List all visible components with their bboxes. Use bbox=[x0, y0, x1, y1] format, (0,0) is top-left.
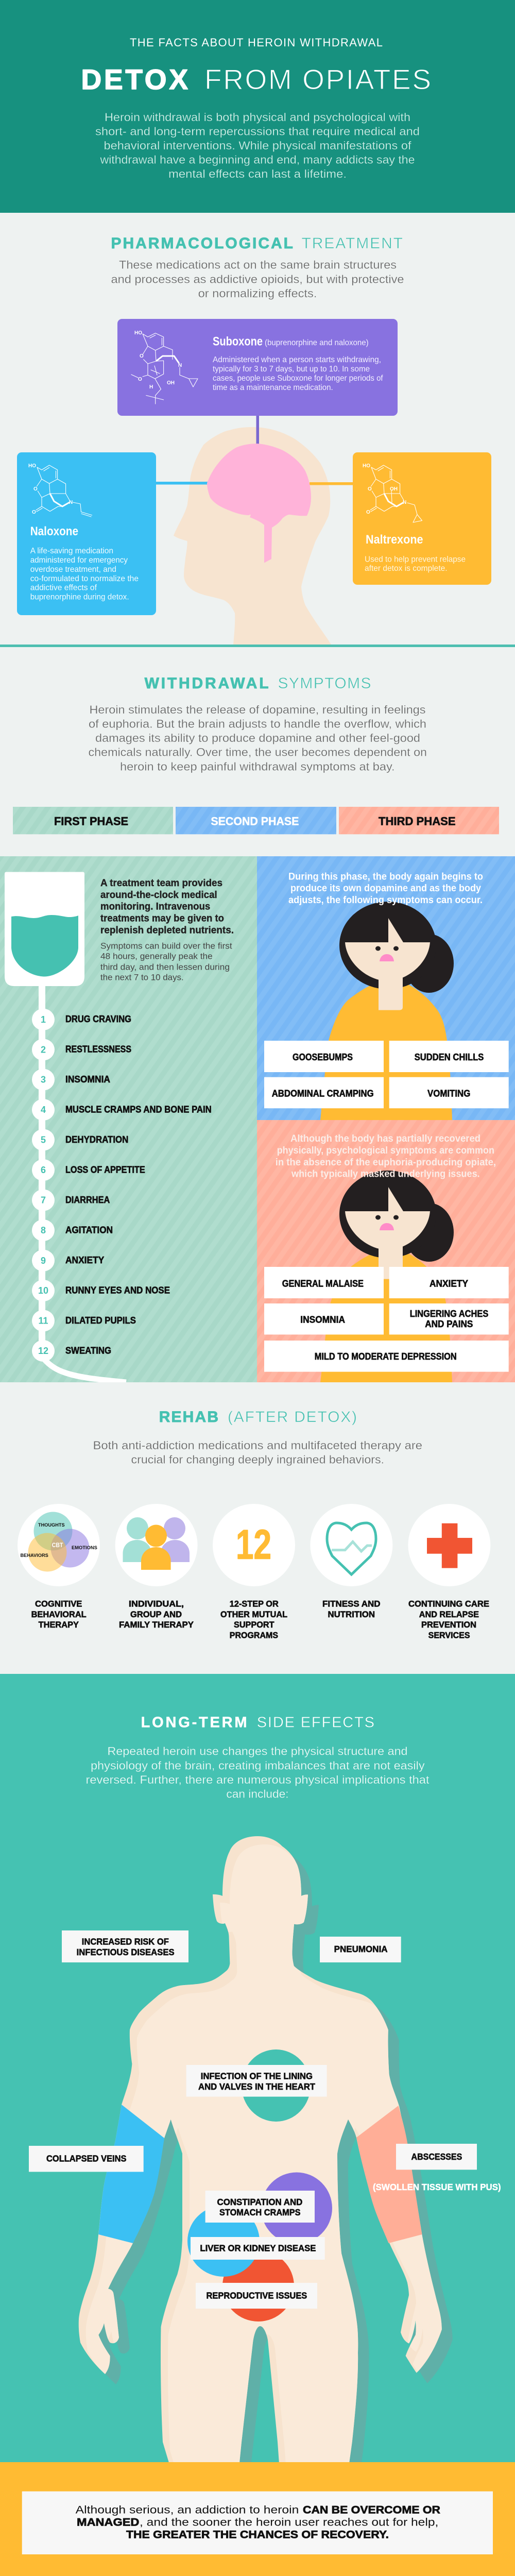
icon: cbt venn diagram: EMOTIONS bbox=[72, 1545, 97, 1551]
icon: iv tube bbox=[39, 984, 126, 1382]
symptom: lingering aches and pains: AND PAINS bbox=[425, 1319, 473, 1329]
second phase text: During this phase, the body again begins to bbox=[288, 872, 483, 882]
card: naloxone bbox=[17, 452, 156, 615]
molecule: naloxone: HO bbox=[28, 463, 36, 469]
molecule: suboxone: N bbox=[178, 363, 182, 368]
illustration: human body bbox=[79, 1836, 453, 2488]
heading: pharmacological treatment: PHARMACOLOGICAL bbox=[111, 235, 293, 252]
icon: cbt venn diagram: CBT bbox=[52, 1541, 63, 1549]
icon: cbt venn diagram: BEHAVIORS bbox=[21, 1553, 48, 1558]
panel: rehab bbox=[0, 1382, 515, 1674]
label: cognitive behavioral therapy bbox=[31, 1600, 87, 1630]
first phase lead text: monitoring. Intravenous bbox=[100, 902, 210, 912]
symptom: mild to moderate depression bbox=[264, 1341, 509, 1372]
long-term intro text: Repeated heroin use changes the physical structure and bbox=[107, 1744, 408, 1758]
suboxone description: time as a maintenance medication. bbox=[213, 383, 333, 392]
abscesses note: (SWOLLEN TISSUE WITH PUS) bbox=[373, 2182, 501, 2192]
header intro text: behavioral interventions. While physical manifestations of bbox=[104, 139, 411, 152]
callout: heart infection: AND VALVES IN THE HEART bbox=[198, 2081, 315, 2092]
symptom list: 2 bbox=[41, 1045, 46, 1055]
heading: withdrawal symptoms: SYMPTOMS bbox=[278, 675, 371, 692]
long-term intro text bbox=[85, 1744, 430, 1801]
closing text: MANAGED bbox=[77, 2517, 139, 2529]
symptom list: DRUG CRAVING bbox=[65, 1014, 131, 1024]
label: continuing care: PREVENTION bbox=[421, 1620, 476, 1630]
third phase text: in the absence of the euphoria-producing opiate, bbox=[276, 1157, 496, 1168]
heading: rehab: REHAB bbox=[159, 1409, 218, 1426]
symptom: insomnia: INSOMNIA bbox=[300, 1315, 345, 1325]
withdrawal intro text: of euphoria. But the brain adjusts to handle the overflow, which bbox=[89, 718, 426, 731]
heading: rehab bbox=[159, 1409, 357, 1426]
withdrawal intro text: chemicals naturally. Over time, the user becomes dependent on bbox=[89, 746, 427, 759]
naltrexone description: Used to help prevent relapse bbox=[365, 555, 466, 564]
molecule: naltrexone: OH bbox=[390, 486, 398, 492]
label: individual, group and family therapy: FAMILY THERAPY bbox=[119, 1620, 194, 1630]
label: continuing care: CONTINUING CARE bbox=[408, 1600, 489, 1609]
heading: pharmacological treatment: TREATMENT bbox=[302, 235, 403, 252]
molecule: naltrexone: HO bbox=[363, 463, 370, 469]
callout: collapsed veins bbox=[29, 2146, 144, 2172]
symptom list: 10 bbox=[38, 1285, 48, 1296]
symptom list: DIARRHEA bbox=[65, 1195, 110, 1205]
callout: infectious diseases: INFECTIOUS DISEASES bbox=[77, 1947, 175, 1957]
illustration: brain bbox=[207, 444, 311, 563]
callout: infectious diseases: INCREASED RISK OF bbox=[82, 1936, 169, 1946]
symptom: goosebumps bbox=[264, 1041, 384, 1072]
molecule: naltrexone: O bbox=[368, 486, 372, 492]
first phase detail text: 48 hours, generally peak the bbox=[100, 952, 213, 961]
callout: infectious diseases bbox=[62, 1930, 188, 1962]
molecule: naloxone: O bbox=[32, 510, 36, 515]
symptom list: RESTLESSNESS bbox=[65, 1044, 131, 1054]
third phase text: which typically masked underlying issues. bbox=[291, 1169, 480, 1180]
pharmacological intro text bbox=[111, 259, 404, 300]
icon: heart with pulse bbox=[310, 1504, 392, 1586]
withdrawal intro text: heroin to keep painful withdrawal symptoms at bay. bbox=[120, 760, 395, 773]
label: 12-step programs: SUPPORT bbox=[234, 1620, 274, 1630]
heading: long-term side effects: LONG-TERM bbox=[141, 1715, 247, 1731]
panel: first phase bbox=[0, 856, 257, 1382]
symptom: general malaise: GENERAL MALAISE bbox=[282, 1278, 364, 1289]
symptom list: ANXIETY bbox=[65, 1255, 104, 1265]
molecule: naloxone: N bbox=[69, 500, 73, 505]
molecule: suboxone: H bbox=[149, 384, 153, 390]
molecule: suboxone: O bbox=[140, 353, 144, 359]
card: naltrexone bbox=[353, 452, 491, 585]
callout: pneumonia bbox=[320, 1937, 401, 1962]
title: FROM OPIATES bbox=[204, 63, 431, 95]
symptom: sudden chills: SUDDEN CHILLS bbox=[415, 1052, 484, 1062]
icon: number 12: 12 bbox=[236, 1522, 271, 1568]
header kicker: THE FACTS ABOUT HEROIN WITHDRAWAL bbox=[130, 36, 383, 49]
callout: pneumonia: PNEUMONIA bbox=[334, 1944, 388, 1954]
naloxone description: addictive effects of bbox=[30, 584, 97, 592]
closing text bbox=[76, 2504, 440, 2541]
molecule: suboxone bbox=[131, 330, 198, 404]
title: DETOX bbox=[81, 63, 188, 95]
icon: cbt venn diagram: THOUGHTS bbox=[38, 1522, 65, 1528]
arm highlight: collapsed veins bbox=[98, 2105, 164, 2243]
illustration: woman bbox=[320, 902, 454, 1120]
symptom: mild to moderate depression: MILD TO MODERATE DEPRESSION bbox=[315, 1351, 457, 1362]
panel: pharmacological treatment bbox=[17, 235, 491, 645]
rehab intro text bbox=[93, 1439, 422, 1466]
panel: withdrawal symptoms intro bbox=[13, 675, 499, 834]
molecule: naloxone: O bbox=[33, 486, 38, 492]
title bbox=[81, 63, 431, 95]
callout: liver or kidney disease: LIVER OR KIDNEY DISEASE bbox=[200, 2243, 316, 2253]
label: individual, group and family therapy: GROUP AND bbox=[130, 1610, 182, 1619]
suboxone description: Administered when a person starts withdrawing, bbox=[213, 355, 381, 364]
label: continuing care: AND RELAPSE bbox=[419, 1610, 479, 1619]
tab: third phase: THIRD PHASE bbox=[379, 815, 456, 828]
first phase detail text bbox=[100, 941, 232, 982]
closing text: Although serious, an addiction to heroin bbox=[76, 2504, 299, 2516]
icon: group of people bbox=[115, 1504, 198, 1586]
first phase lead text: A treatment team provides bbox=[100, 878, 222, 889]
illustration: head profile bbox=[174, 427, 331, 645]
connector: suboxone bbox=[256, 416, 259, 445]
first phase lead text: treatments may be given to bbox=[100, 913, 224, 924]
heading: pharmacological treatment bbox=[111, 235, 403, 252]
long-term intro text: can include: bbox=[226, 1788, 289, 1801]
symptom list: 11 bbox=[38, 1316, 48, 1326]
suboxone description: typically for 3 to 7 days, but up to 10. In some bbox=[213, 365, 370, 374]
panel: closing message bbox=[0, 2462, 515, 2576]
second phase text bbox=[288, 872, 483, 906]
symptom list: MUSCLE CRAMPS AND BONE PAIN bbox=[65, 1105, 212, 1115]
first phase lead text bbox=[100, 878, 234, 936]
tab: first phase: FIRST PHASE bbox=[54, 815, 128, 828]
molecule: naltrexone bbox=[363, 463, 422, 522]
callout: abscesses bbox=[396, 2144, 477, 2170]
closing text: THE GREATER THE CHANCES OF RECOVERY. bbox=[126, 2529, 389, 2541]
symptom list: 5 bbox=[41, 1135, 46, 1145]
arm highlight: abscesses bbox=[356, 2106, 422, 2243]
molecule: naltrexone: O bbox=[366, 510, 370, 515]
symptom list: INSOMNIA bbox=[65, 1074, 110, 1084]
naloxone description: buprenorphine during detox. bbox=[30, 592, 129, 602]
label: cognitive behavioral therapy: THERAPY bbox=[39, 1620, 79, 1630]
symptom: vomiting bbox=[389, 1077, 509, 1108]
label: 12-step programs bbox=[220, 1600, 287, 1640]
callout: constipation: STOMACH CRAMPS bbox=[219, 2207, 301, 2217]
callout: reproductive issues bbox=[196, 2283, 317, 2309]
callout: constipation: CONSTIPATION AND bbox=[217, 2197, 302, 2207]
panel: third phase bbox=[257, 1120, 515, 1382]
callout: constipation bbox=[205, 2191, 315, 2223]
heading: withdrawal symptoms bbox=[145, 675, 371, 692]
naltrexone name: Naltrexone bbox=[366, 533, 423, 547]
header intro text: withdrawal have a beginning and end, many addicts say the bbox=[99, 154, 415, 166]
callout: heart infection bbox=[186, 2065, 327, 2097]
symptom: anxiety: ANXIETY bbox=[430, 1278, 468, 1289]
withdrawal intro text: damages its ability to produce dopamine and other feel-good bbox=[95, 732, 420, 744]
panel: header bbox=[0, 0, 515, 213]
pharmacological intro text: These medications act on the same brain structures bbox=[119, 259, 397, 272]
symptom list: RUNNY EYES AND NOSE bbox=[65, 1285, 170, 1295]
heading: long-term side effects: SIDE EFFECTS bbox=[257, 1715, 374, 1731]
tab: second phase: SECOND PHASE bbox=[211, 815, 299, 828]
tab: third phase bbox=[339, 807, 499, 834]
symptom list: 12 bbox=[38, 1346, 48, 1356]
suboxone name: Suboxone bbox=[213, 335, 263, 349]
naloxone description: administered for emergency bbox=[30, 556, 128, 565]
third phase text: Although the body has partially recovered bbox=[290, 1133, 480, 1144]
label: individual, group and family therapy: INDIVIDUAL, bbox=[129, 1600, 184, 1609]
header intro text bbox=[95, 111, 420, 180]
symptom list: SWEATING bbox=[65, 1346, 111, 1356]
label: 12-step programs: 12-STEP OR bbox=[230, 1600, 279, 1609]
symptom: sudden chills bbox=[389, 1041, 509, 1072]
symptom list: 6 bbox=[41, 1165, 46, 1175]
organ: reproductive bbox=[222, 2250, 294, 2321]
symptom list bbox=[32, 1009, 212, 1362]
molecule: naltrexone: N bbox=[403, 500, 406, 505]
label: 12-step programs: PROGRAMS bbox=[230, 1631, 278, 1640]
suboxone description: cases, people use Suboxone for longer periods of bbox=[213, 374, 383, 383]
label: continuing care bbox=[408, 1600, 489, 1640]
header intro text: short- and long-term repercussions that require medical and bbox=[95, 125, 420, 138]
first phase detail text: the next 7 to 10 days. bbox=[100, 973, 184, 982]
naltrexone description bbox=[365, 555, 466, 573]
naloxone description bbox=[30, 547, 139, 602]
molecule: suboxone: OH bbox=[167, 380, 175, 386]
second phase text: adjusts, the following symptoms can occur. bbox=[288, 895, 483, 906]
icon: iv bag bbox=[5, 872, 84, 986]
third phase text: physically, psychological symptoms are common bbox=[277, 1145, 494, 1156]
card: suboxone bbox=[117, 319, 398, 416]
panel: second phase bbox=[257, 856, 515, 1120]
connector: naloxone bbox=[156, 482, 209, 484]
first phase lead text: around-the-clock medical bbox=[100, 890, 217, 901]
symptom: abdominal cramping: ABDOMINAL CRAMPING bbox=[272, 1088, 374, 1098]
label: cognitive behavioral therapy: BEHAVIORAL bbox=[31, 1610, 87, 1619]
symptom list: 4 bbox=[41, 1105, 46, 1115]
callout: reproductive issues: REPRODUCTIVE ISSUES bbox=[206, 2290, 307, 2300]
tab: first phase bbox=[13, 807, 173, 834]
symptom list: 9 bbox=[41, 1256, 46, 1266]
label: 12-step programs: OTHER MUTUAL bbox=[220, 1610, 287, 1619]
symptom: anxiety bbox=[389, 1267, 509, 1298]
long-term intro text: physiology of the brain, creating imbalances that are not easily bbox=[91, 1759, 425, 1772]
icon: cbt venn diagram bbox=[18, 1504, 100, 1586]
callout: heart infection: INFECTION OF THE LINING bbox=[201, 2071, 313, 2081]
first phase lead text: replenish depleted nutrients. bbox=[100, 925, 234, 936]
illustration: woman bbox=[320, 1171, 454, 1382]
organ: stomach bbox=[261, 2172, 332, 2244]
label: fitness and nutrition: NUTRITION bbox=[328, 1610, 375, 1619]
symptom list: 3 bbox=[41, 1075, 46, 1085]
callout: liver or kidney disease bbox=[191, 2237, 325, 2260]
suboxone subtitle: (buprenorphine and naloxone) bbox=[265, 338, 369, 347]
label: continuing care: SERVICES bbox=[428, 1631, 470, 1640]
tab: second phase bbox=[176, 807, 336, 834]
closing text: CAN BE OVERCOME OR bbox=[303, 2504, 440, 2516]
symptom list: 8 bbox=[41, 1225, 46, 1235]
naloxone description: overdose treatment, and bbox=[30, 565, 116, 574]
header intro text: mental effects can last a lifetime. bbox=[168, 167, 347, 180]
withdrawal intro text bbox=[89, 703, 427, 773]
suboxone description bbox=[213, 355, 383, 392]
molecule: suboxone: HO bbox=[134, 330, 142, 336]
symptom: lingering aches and pains bbox=[389, 1303, 509, 1334]
symptom list: 7 bbox=[41, 1195, 46, 1206]
second phase text: produce its own dopamine and as the body bbox=[290, 883, 481, 894]
symptom list: 1 bbox=[41, 1014, 46, 1025]
symptom: vomiting: VOMITING bbox=[427, 1088, 470, 1098]
naloxone name: Naloxone bbox=[30, 524, 78, 538]
rehab intro text: crucial for changing deeply ingrained behaviors. bbox=[131, 1453, 384, 1466]
label: individual, group and family therapy bbox=[119, 1600, 194, 1630]
label: fitness and nutrition bbox=[322, 1600, 381, 1619]
closing text: , and the sooner the heroin user reaches out for help, bbox=[140, 2517, 438, 2529]
organ: liver bbox=[187, 2206, 260, 2277]
label: cognitive behavioral therapy: COGNITIVE bbox=[35, 1600, 82, 1609]
connector: naltrexone bbox=[310, 482, 353, 485]
label: fitness and nutrition: FITNESS AND bbox=[322, 1600, 381, 1609]
heading: withdrawal symptoms: WITHDRAWAL bbox=[145, 675, 269, 692]
heading: rehab: (AFTER DETOX) bbox=[228, 1409, 357, 1426]
icon: medical cross bbox=[408, 1504, 490, 1586]
symptom: general malaise bbox=[264, 1267, 384, 1298]
symptom: lingering aches and pains: LINGERING ACHES bbox=[410, 1309, 488, 1319]
heading: long-term side effects bbox=[141, 1715, 374, 1731]
symptom list: DEHYDRATION bbox=[65, 1134, 128, 1145]
icon: number 12 bbox=[213, 1504, 295, 1586]
symptom: insomnia bbox=[264, 1303, 384, 1334]
third phase text bbox=[276, 1133, 496, 1180]
pharmacological intro text: or normalizing effects. bbox=[198, 287, 317, 300]
naloxone description: A life-saving medication bbox=[30, 547, 113, 555]
symptom list: DILATED PUPILS bbox=[65, 1315, 136, 1326]
molecule: suboxone: O bbox=[138, 377, 142, 382]
organ: heart bbox=[242, 2049, 311, 2122]
symptom: goosebumps: GOOSEBUMPS bbox=[293, 1052, 353, 1062]
molecule: naloxone bbox=[28, 463, 92, 517]
first phase detail text: third day, and then lessen during bbox=[100, 962, 230, 972]
symptom list: AGITATION bbox=[65, 1225, 113, 1235]
long-term intro text: reversed. Further, there are numerous physical implications that bbox=[85, 1773, 430, 1786]
naloxone description: co-formulated to normalize the bbox=[30, 574, 139, 583]
panel: long-term side effects bbox=[0, 1674, 515, 2488]
pharmacological intro text: and processes as addictive opioids, but with protective bbox=[111, 273, 404, 286]
rehab intro text: Both anti-addiction medications and multifaceted therapy are bbox=[93, 1439, 422, 1452]
withdrawal intro text: Heroin stimulates the release of dopamine, resulting in feelings bbox=[90, 703, 425, 716]
naltrexone description: after detox is complete. bbox=[365, 564, 448, 573]
header intro text: Heroin withdrawal is both physical and psychological with bbox=[105, 111, 410, 124]
symptom list: LOSS OF APPETITE bbox=[65, 1164, 145, 1175]
symptom: abdominal cramping bbox=[264, 1077, 384, 1108]
first phase detail text: Symptoms can build over the first bbox=[100, 941, 232, 951]
callout: abscesses: ABSCESSES bbox=[411, 2151, 462, 2162]
callout: collapsed veins: COLLAPSED VEINS bbox=[46, 2154, 127, 2164]
